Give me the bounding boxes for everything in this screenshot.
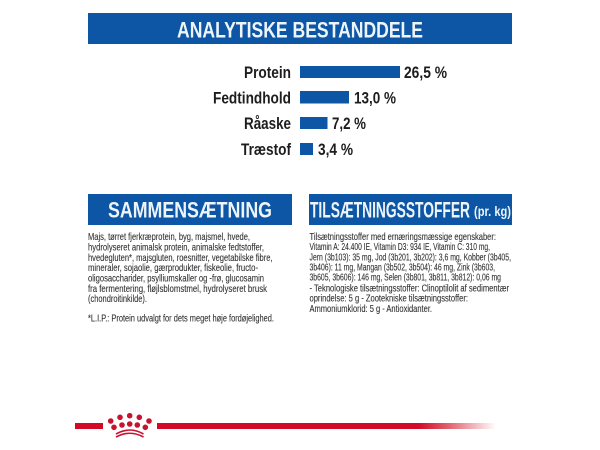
text block: composition: Majs, tørret fjerkræprotein, byg, majsmel, hvede, — [88, 232, 250, 243]
text block: additives: 3b605, 3b606): 146 mg, Selen (3b801, 3b811, 3b812): 0,06 mg — [310, 272, 501, 284]
row: traestof: Træstof — [241, 140, 291, 159]
text block: composition: oligosaccharider, psylliumskaller og -frø, glucosamin — [88, 274, 264, 284]
row: fedtindhold — [213, 88, 396, 108]
text block: additives — [310, 232, 511, 315]
row: protein: Protein — [244, 63, 291, 82]
row: raaaske: Råaske — [244, 114, 291, 133]
text block: additives: - Teknologiske tilsætningsstoffer: Clinoptilolit af sedimentær — [310, 284, 509, 294]
text block: composition: mineraler, sojaolie, gærprodukter, fiskeolie, fructo- — [88, 263, 258, 274]
row: traestof: 3,4 % — [318, 140, 353, 159]
heading banner: tilsaetningsstoffer: (pr. kg) — [474, 203, 511, 219]
text block: additives: Vitamin A: 24.400 IE, Vitamin D3: 934 IE, Vitamin C: 310 mg, — [310, 242, 490, 253]
text block: composition: hvedegluten*, majsgluten, roesnitter, vegetabilske fibre, — [88, 253, 272, 264]
heading banner: tilsaetningsstoffer — [309, 194, 512, 225]
text block: additives: Jern (3b103): 35 mg, Jod (3b201, 3b202): 3,6 mg, Kobber (3b405, — [310, 252, 511, 264]
bar chart: analytical constituents — [213, 63, 447, 159]
heading banner: tilsaetningsstoffer: TILSÆTNINGSSTOFFER — [310, 198, 470, 222]
text block: additives: Tilsætningsstoffer med ernæringsmæssige egenskaber: — [310, 232, 496, 243]
heading banner: sammensaetning: SAMMENSÆTNING — [108, 198, 272, 222]
row: raaaske — [244, 114, 366, 133]
text block: composition — [88, 232, 274, 324]
row: fedtindhold: 13,0 % — [354, 88, 396, 108]
footer: red rule with crown logo — [75, 413, 496, 437]
text block: composition: *L.I.P.: Protein udvalgt for dets meget høje fordøjelighed. — [88, 314, 274, 324]
text block: additives: 3b406): 11 mg, Mangan (3b502, 3b504): 46 mg, Zink (3b603, — [310, 262, 495, 274]
heading banner: sammensaetning — [88, 194, 292, 225]
row: raaaske: 7,2 % — [332, 114, 366, 133]
icon: royal canin crown — [108, 413, 152, 437]
text block: composition: (chondroitinkilde). — [88, 294, 147, 305]
text block: composition: fra fermentering, fløjlsblomstmel, hydrolyseret brusk — [88, 284, 268, 295]
title banner: analytiske bestanddele — [88, 13, 512, 44]
row: traestof — [241, 140, 353, 159]
title banner: analytiske bestanddele: ANALYTISKE BESTANDDELE — [177, 18, 423, 42]
text block: composition: hydrolyseret animalsk protein, animalske fedtstoffer, — [88, 242, 264, 254]
row: fedtindhold: Fedtindhold — [213, 88, 291, 108]
text block: additives: Ammoniumklorid: 5 g - Antioxidanter. — [310, 304, 432, 315]
row: protein — [244, 63, 447, 82]
text block: additives: oprindelse: 5 g - Zootekniske tilsætningsstoffer: — [310, 294, 468, 304]
row: protein: 26,5 % — [404, 63, 447, 82]
